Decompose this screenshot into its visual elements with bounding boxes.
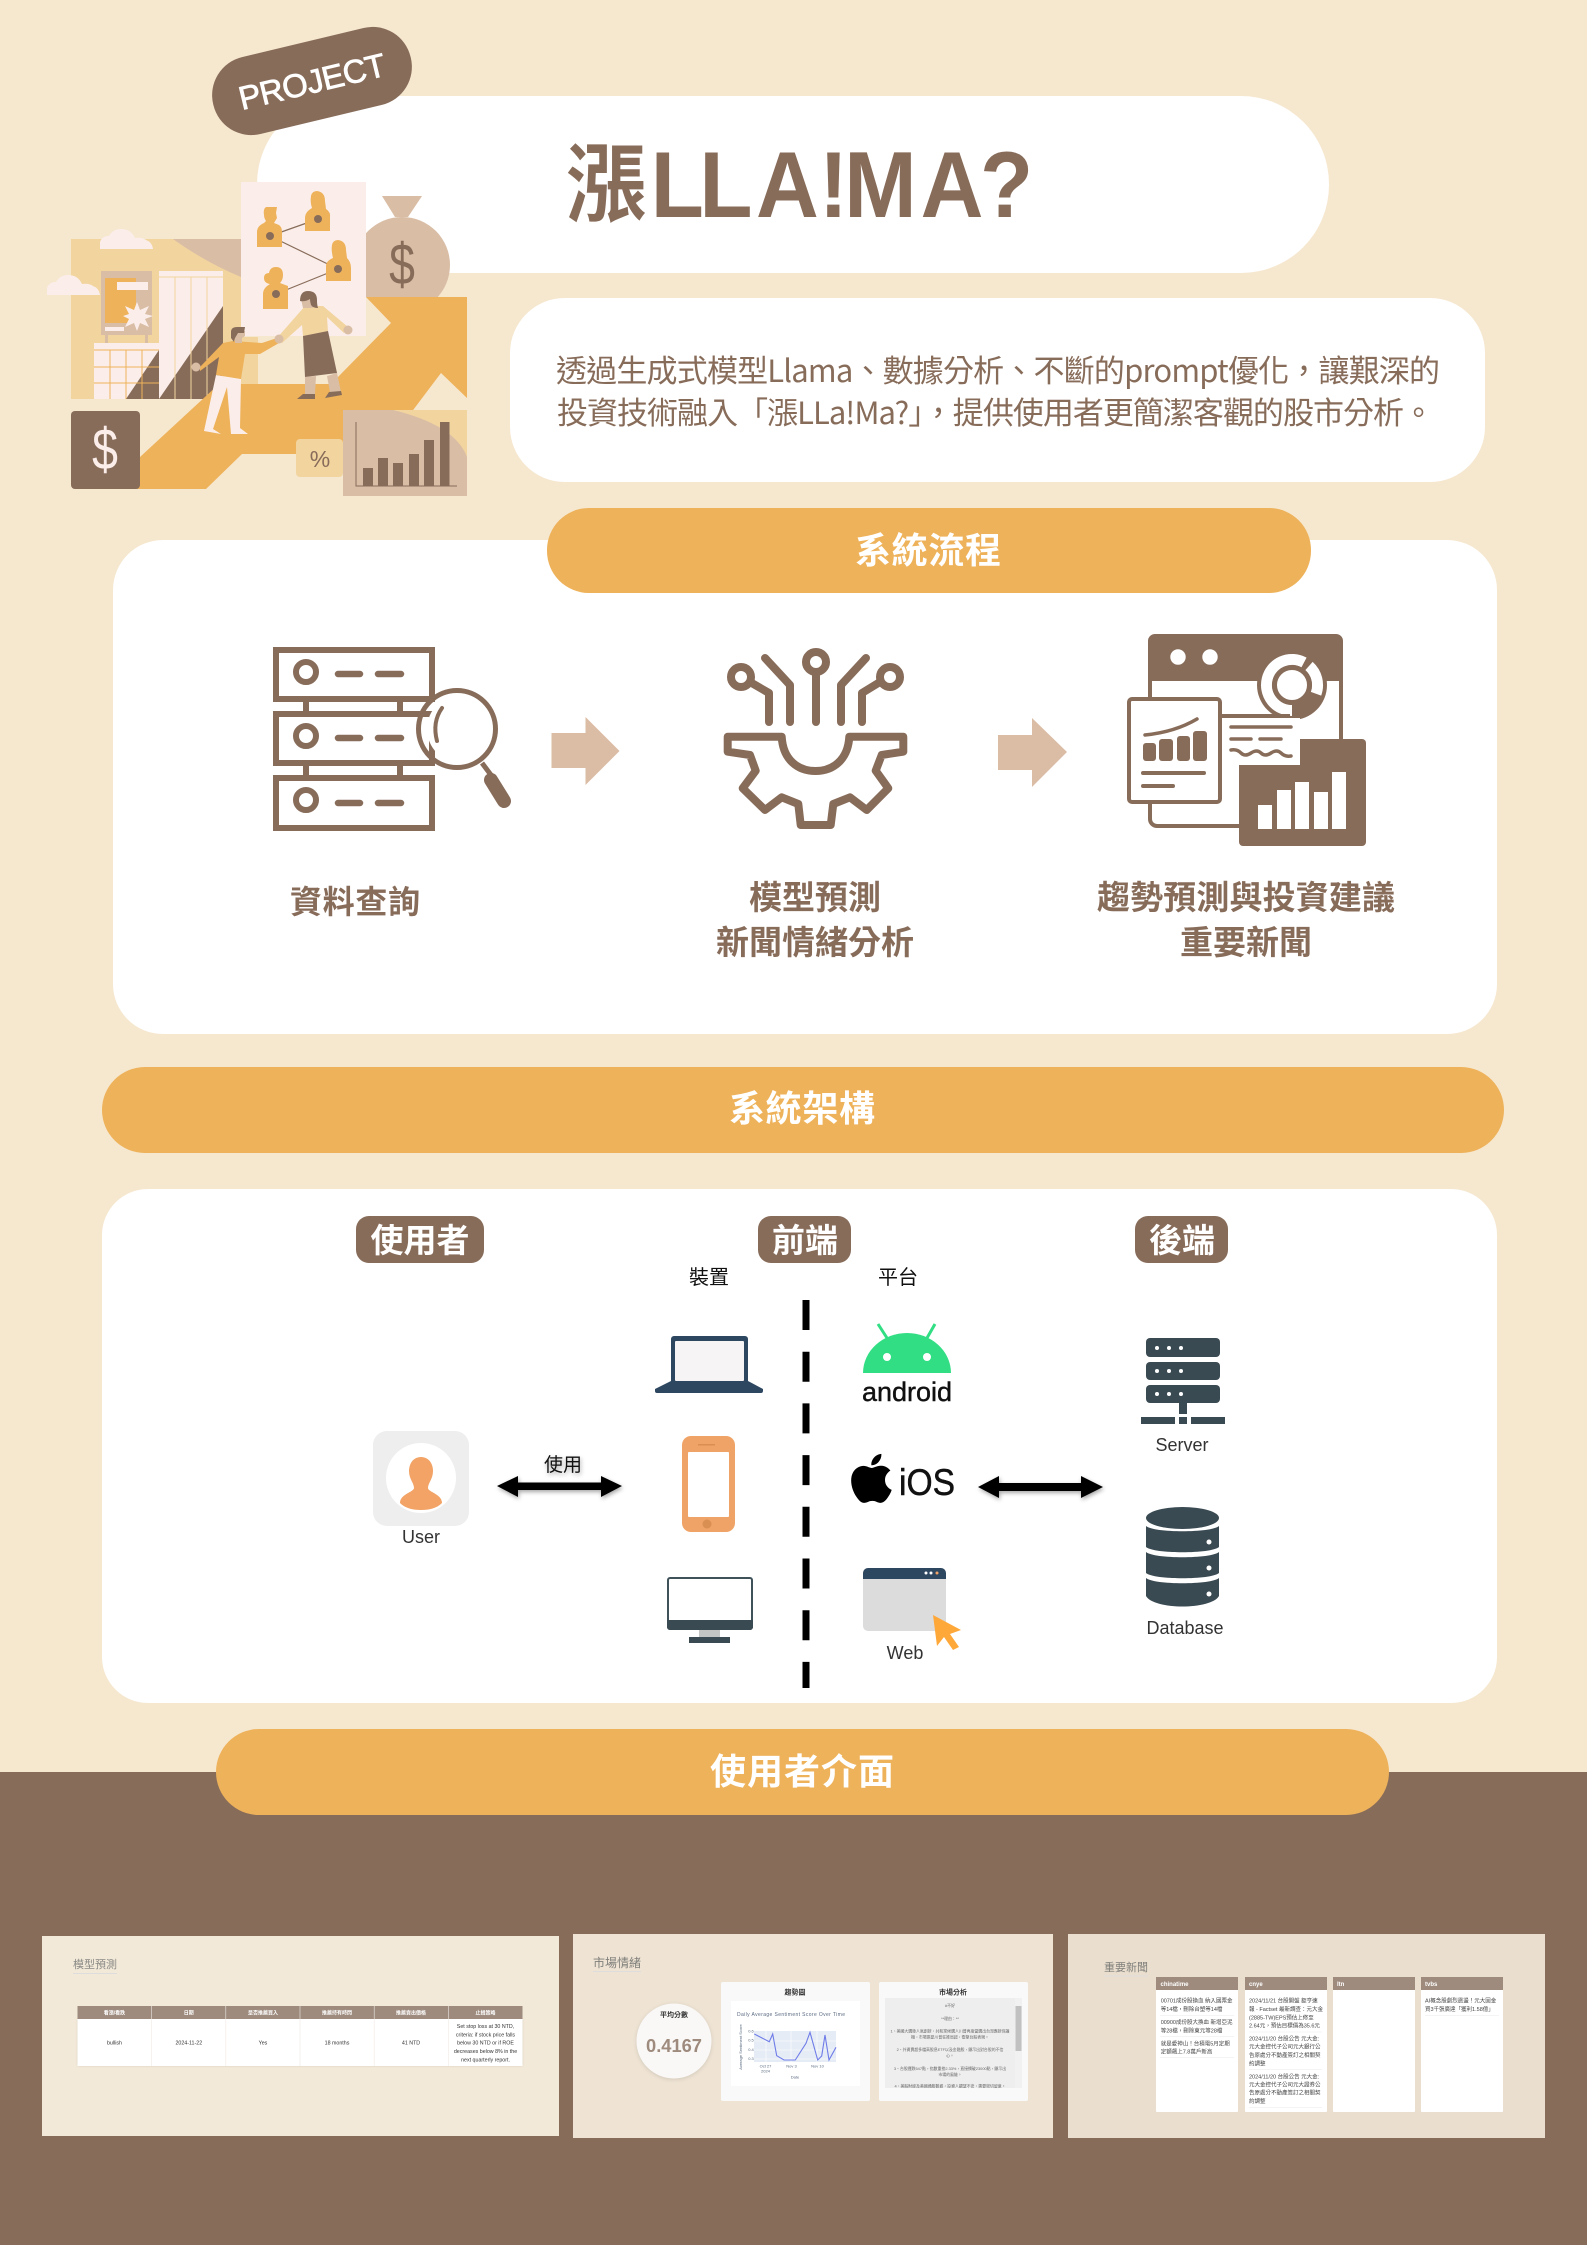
icon: iOS xyxy=(851,1454,955,1503)
icon: desktop monitor xyxy=(667,1578,753,1643)
table: prediction result: Set stop loss at 30 NTD, xyxy=(457,2024,514,2030)
badge: backend xyxy=(1135,1216,1228,1263)
news column: tvbs: AI概念股劇烈震盪！元大固金 xyxy=(1425,1997,1497,2005)
news column: cnye: 告原處分不動產簽訂之相關契 xyxy=(1249,2051,1321,2059)
text box: market analysis xyxy=(879,1982,1028,2101)
line chart: daily sentiment: 0.3 xyxy=(748,2056,755,2061)
news column: cnye xyxy=(1245,1977,1327,2112)
line chart: daily sentiment xyxy=(721,1982,870,2101)
icon: user avatar xyxy=(373,1431,469,1547)
table: prediction result: below 30 NTD or if ROE xyxy=(457,2041,514,2047)
intro text panel xyxy=(510,298,1485,482)
icon: server with magnifier xyxy=(276,650,504,828)
badge: PROJECT xyxy=(204,19,420,143)
icon: web browser: Web xyxy=(887,1643,923,1663)
news column: ltn xyxy=(1333,1977,1415,2112)
icon: android: android xyxy=(862,1377,952,1407)
illustration: business people and growth arrow: $ xyxy=(389,232,415,297)
news column: cnye: 2024/11/21 台股開盤 鉅亨速 xyxy=(1249,1997,1318,2005)
arrow: platform to backend xyxy=(978,1476,1103,1498)
news column: chinatime: 等14檔，刪除台塑等14檔 xyxy=(1161,2005,1223,2013)
table: prediction result: 推薦賣出價格 xyxy=(396,2010,426,2016)
line chart: daily sentiment: Daily Average Sentiment Score Over Time xyxy=(737,2012,845,2018)
news column: chinatime: 00900成份股大換血 新增亞泥 xyxy=(1161,2018,1233,2026)
text box: market analysis: 1、美國大選後人氣創新，共和黨候選人川普再度當選出台灣應新保護 xyxy=(891,2028,1010,2034)
intro text panel: 透過生成式模型Llama、數據分析、不斷的prompt優化，讓艱深的 xyxy=(556,346,1440,391)
news column: chinatime: 定額飆上7.8萬戶新高 xyxy=(1161,2048,1213,2056)
label: trend prediction and key news xyxy=(1097,879,1395,961)
heading: system architecture: 系統架構 xyxy=(729,1088,875,1129)
arrow: query to model xyxy=(552,717,620,785)
icon: laptop xyxy=(655,1336,763,1393)
text box: market analysis: #不好 xyxy=(945,2003,955,2008)
badge: user: 使用者 xyxy=(370,1222,470,1259)
text box: market analysis: 3、台股運跌547點，指數重挫2.33%，直接摜破23000點，顯示出 xyxy=(894,2066,1006,2071)
heading: user interface: 使用者介面 xyxy=(710,1751,894,1792)
label: trend prediction and key news: 重要新聞 xyxy=(1180,924,1312,961)
text box: market analysis: 心。 xyxy=(946,2053,954,2058)
text box: market analysis: 市場的風險。 xyxy=(938,2072,962,2077)
line chart: daily sentiment: Nov 3 xyxy=(786,2064,797,2068)
text box: market analysis: 機，市場擔憂川普狂推局起，衝擊台股表現。 xyxy=(911,2034,989,2040)
panel: system flow xyxy=(113,508,1497,1034)
line chart: daily sentiment: 2024 xyxy=(761,2068,771,2074)
news column: cnye: 2024/11/20 台股公告 元大金: xyxy=(1249,2035,1320,2043)
heading: system flow: 系統流程 xyxy=(855,530,1001,571)
table: prediction result: 看漲/看跌 xyxy=(104,2010,125,2016)
news column: cnye: 2.64元，預估目標價為35.6元 xyxy=(1249,2022,1320,2030)
text box: market analysis: 4、美股財經及美國通膨數據，投資人觀望不安，需要密切留意。 xyxy=(894,2084,1006,2088)
line chart: daily sentiment: Nov 10 xyxy=(811,2064,825,2068)
icon: analytics dashboard xyxy=(1129,634,1366,846)
news column: chinatime: 就是愛神山！台積電5月定期 xyxy=(1161,2039,1230,2047)
line chart: daily sentiment: 0.5 xyxy=(748,2038,755,2042)
label: platforms: 平台 xyxy=(878,1266,918,1289)
icon: AI circuit gear xyxy=(728,652,903,825)
icon: database: Database xyxy=(1146,1618,1224,1638)
arrow: model to trends xyxy=(998,718,1067,787)
badge: PROJECT: PROJECT xyxy=(235,46,389,117)
table: prediction result: decreases below 8% in the xyxy=(454,2049,517,2055)
title pill: LLA!MA? xyxy=(651,133,1033,238)
line chart: daily sentiment: 趨勢圖 xyxy=(784,1988,806,1996)
title pill: 漲 xyxy=(566,137,646,234)
heading: system flow xyxy=(547,508,1311,593)
line chart: daily sentiment: Oct 27 xyxy=(760,2064,772,2068)
gauge: average score xyxy=(636,2004,712,2078)
icon: iOS: iOS xyxy=(899,1462,955,1503)
news column: chinatime: 00701成份股換血 納入國票金 xyxy=(1161,1997,1233,2005)
news column: chinatime xyxy=(1156,1977,1238,2112)
title pill xyxy=(257,96,1329,273)
table: prediction result: 是否推薦買入 xyxy=(248,2010,278,2016)
icon: database xyxy=(1146,1507,1224,1638)
label: trend prediction and key news: 趨勢預測與投資建議 xyxy=(1097,879,1395,916)
icon: web browser xyxy=(863,1568,961,1663)
line chart: daily sentiment: Average Sentiment Score xyxy=(738,2023,743,2070)
news column: cnye: 元大金控代子公司元大銀行公 xyxy=(1249,2043,1321,2051)
arrow: user to device xyxy=(497,1454,622,1497)
icon: server: Server xyxy=(1155,1435,1209,1455)
news column: cnye: 2024/11/20 台股公告 元大金: xyxy=(1249,2072,1320,2080)
icon: user avatar: User xyxy=(402,1527,440,1547)
line chart: daily sentiment: 0.6 xyxy=(748,2028,755,2034)
heading: system architecture xyxy=(102,1067,1504,1153)
icon: phone xyxy=(682,1436,735,1532)
news column: cnye: 元大金控代子公司元大證券公 xyxy=(1249,2080,1321,2088)
news column: cnye: 約調整 xyxy=(1249,2059,1266,2067)
screenshot: market sentiment: 市場情緒 xyxy=(593,1955,641,1970)
line chart: daily sentiment: Date xyxy=(791,2074,800,2080)
icon: android xyxy=(862,1324,952,1407)
label: devices: 裝置 xyxy=(689,1266,729,1289)
news column: cnye: 報 - Factset 最新調查：元大金 xyxy=(1249,2005,1323,2013)
table: prediction result: 41 NTD xyxy=(402,2040,420,2046)
table: prediction result: 2024-11-22 xyxy=(175,2040,202,2046)
table: prediction result: Yes xyxy=(259,2040,268,2046)
gauge: average score: 0.4167 xyxy=(646,2035,702,2056)
label: data query: 資料查詢 xyxy=(290,884,420,920)
illustration: business people and growth arrow: % xyxy=(310,446,330,472)
table: prediction result: 日期 xyxy=(184,2010,194,2016)
line chart: daily sentiment: 0.4 xyxy=(748,2047,755,2052)
label: model prediction and news sentiment: 模型預測 xyxy=(749,879,881,916)
illustration: business people and growth arrow xyxy=(47,182,467,496)
badge: frontend: 前端 xyxy=(772,1222,838,1259)
news column: tvbs xyxy=(1421,1977,1503,2112)
news column: cnye: (2885-TW)EPS預估上修至 xyxy=(1249,2013,1314,2021)
news column: chinatime: 等28檔，刪除東元等28檔 xyxy=(1161,2026,1223,2034)
news column: tvbs: 買3千張廣達「獲利1.58億」 xyxy=(1425,2005,1494,2013)
news column: cnye: 約調整 xyxy=(1249,2097,1266,2105)
label: model prediction and news sentiment: 新聞情緒分析 xyxy=(716,924,914,961)
badge: user xyxy=(356,1216,484,1263)
news column: cnye: 告原處分不動產簽訂之相關契 xyxy=(1249,2089,1321,2097)
badge: frontend xyxy=(758,1216,851,1263)
panel: architecture diagram xyxy=(102,1189,1497,1703)
table: prediction result: bullish xyxy=(107,2040,122,2046)
table: prediction result: next quarterly report. xyxy=(461,2057,510,2063)
intro text panel: 投資技術融入「漲LLa!Ma?」，提供使用者更簡潔客觀的股市分析。 xyxy=(557,388,1434,433)
icon: server xyxy=(1141,1338,1225,1455)
news column: chinatime: chinatime xyxy=(1160,1982,1189,1988)
arrow: user to device: 使用 xyxy=(544,1454,582,1476)
screenshot: key news: 重要新聞 xyxy=(1104,1960,1148,1974)
heading: user interface xyxy=(216,1729,1389,1815)
screenshot: key news xyxy=(1068,1934,1545,2138)
badge: backend: 後端 xyxy=(1149,1222,1215,1259)
news column: cnye: cnye xyxy=(1249,1982,1263,1988)
table: prediction result: 推薦持有時間 xyxy=(322,2010,352,2016)
screenshot: market sentiment xyxy=(573,1934,1053,2138)
news column: ltn: ltn xyxy=(1337,1982,1345,1988)
illustration: business people and growth arrow: $ xyxy=(92,417,118,482)
table: prediction result: 18 months xyxy=(325,2040,350,2046)
text box: market analysis: 2、外資賣超多檔高股息ETF以及金融股，顯示出對台股的不信 xyxy=(897,2047,1003,2052)
table: prediction result: criteria: if stock price falls xyxy=(456,2032,515,2038)
gauge: average score: 平均分數 xyxy=(660,2010,688,2019)
divider: frontend dashed line xyxy=(802,1300,810,1688)
news column: tvbs: tvbs xyxy=(1425,1982,1438,1988)
table: prediction result xyxy=(78,2006,522,2066)
table: prediction result: 止損策略 xyxy=(475,2010,496,2016)
screenshot: model prediction: 模型預測 xyxy=(73,1957,117,1971)
text box: market analysis: 市場分析 xyxy=(939,1988,967,1996)
text box: market analysis: **理由：** xyxy=(941,2016,959,2021)
label: model prediction and news sentiment xyxy=(716,879,914,961)
screenshot: model prediction xyxy=(42,1936,559,2136)
